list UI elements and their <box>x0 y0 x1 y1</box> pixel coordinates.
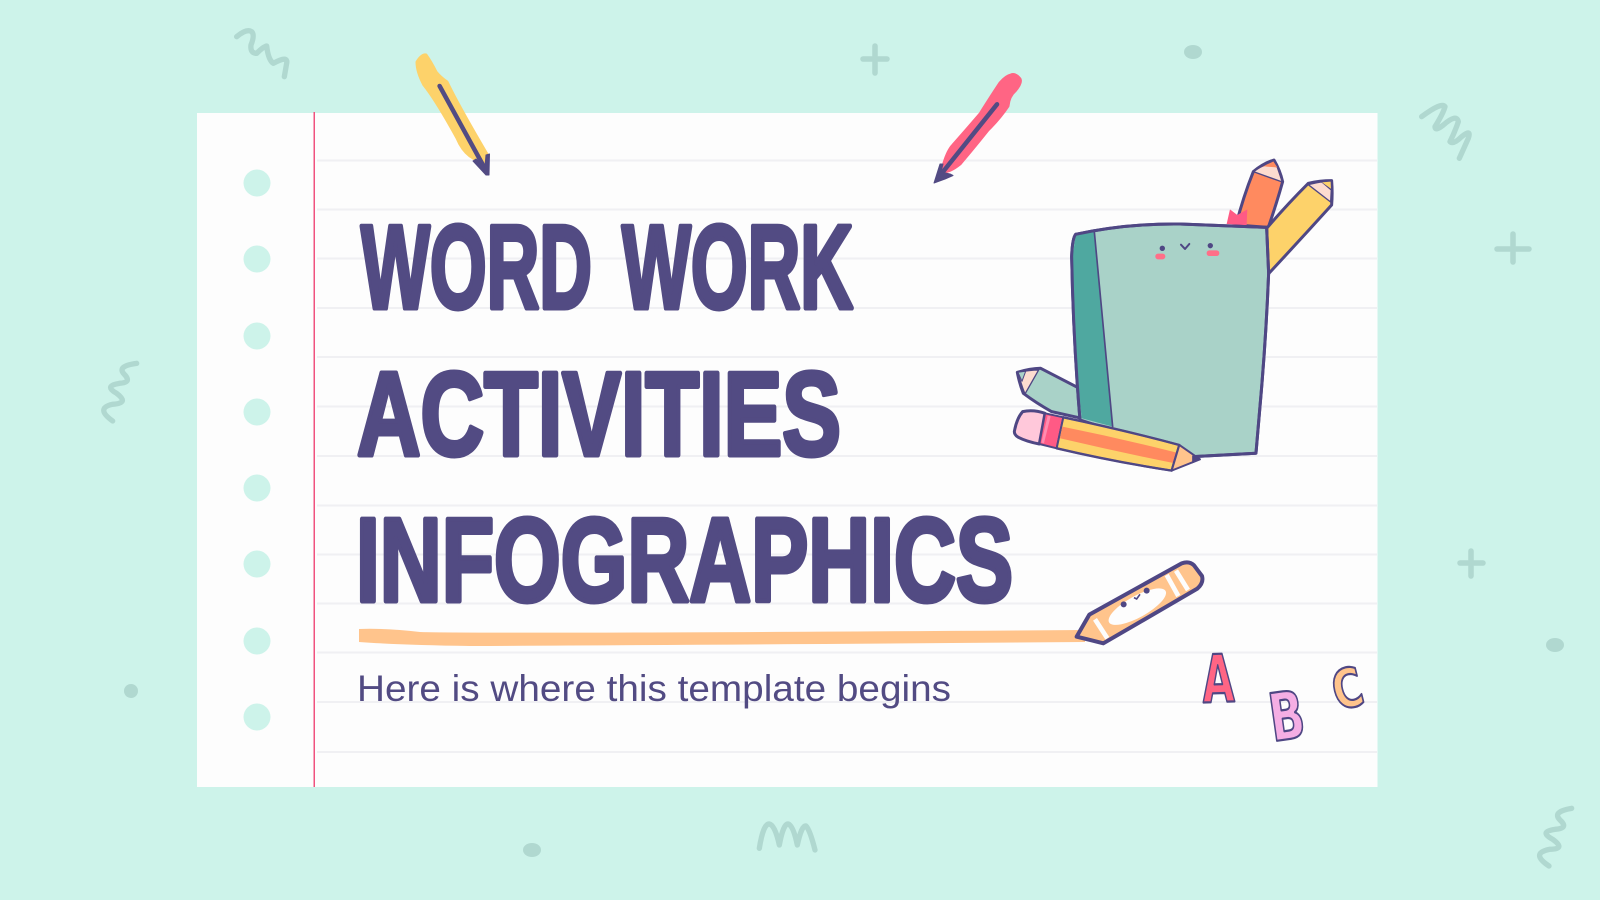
binder holes <box>244 170 270 730</box>
orange pencil <box>1227 160 1283 227</box>
title <box>356 201 1013 627</box>
panel: notebook paper <box>197 112 1378 787</box>
illustration: smiling crayon <box>1077 562 1202 643</box>
cup body <box>1072 224 1269 457</box>
squiggle: top left <box>237 31 287 77</box>
title line 1: WORD <box>361 201 592 334</box>
squiggle: top right <box>1422 105 1469 158</box>
squiggle: bottom centre <box>759 824 815 850</box>
yellow striped pencil <box>1014 411 1200 471</box>
squiggle: bottom right <box>1540 808 1572 866</box>
crayon underline stroke <box>359 629 1085 646</box>
arrow: yellow pencil stroke <box>417 55 490 175</box>
teal pencil <box>1017 368 1082 418</box>
squiggle: left <box>104 363 137 421</box>
plus: right <box>1497 234 1529 262</box>
letter A: A <box>1201 640 1236 719</box>
cup face <box>1155 243 1219 259</box>
margin line <box>314 112 315 787</box>
title line 3: INFOGRAPHICS <box>356 494 1013 627</box>
letters: A B C <box>1201 640 1370 757</box>
plus: top centre <box>863 46 887 73</box>
letter B: B <box>1264 676 1310 757</box>
title line 2: ACTIVITIES <box>357 348 841 481</box>
plus: lower right <box>1460 551 1483 576</box>
illustration: pencil cup <box>1014 160 1332 471</box>
crayon label <box>1104 582 1171 632</box>
crayon face <box>1121 588 1150 607</box>
letter C: C <box>1325 655 1370 723</box>
arrow: red pencil stroke <box>934 74 1020 183</box>
title line 1: WORK <box>622 201 853 334</box>
yellow pencil <box>1267 181 1332 274</box>
subtitle: Here is where this template begins <box>357 668 951 709</box>
